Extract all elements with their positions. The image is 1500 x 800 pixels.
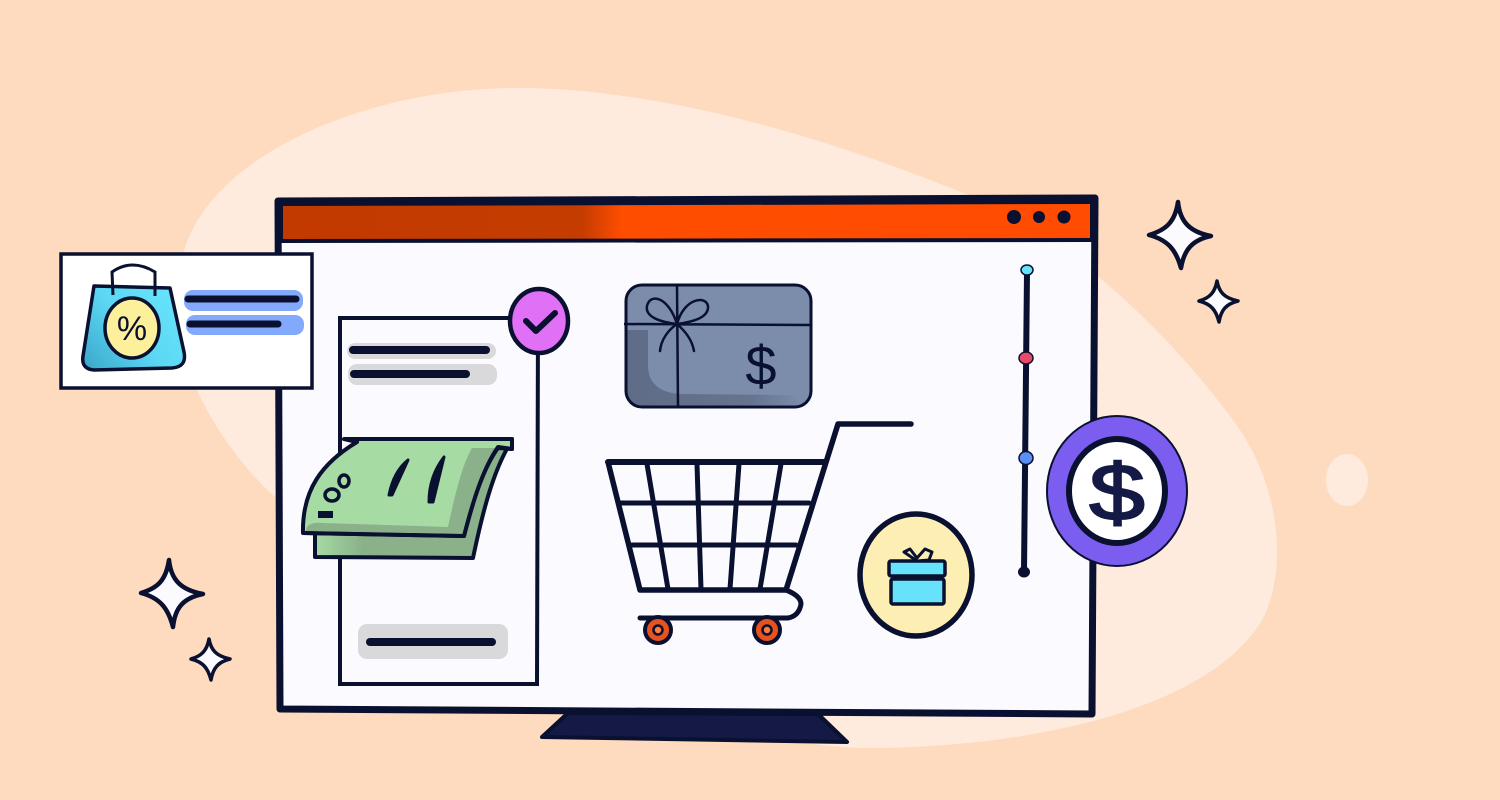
- icon: shopping bag with percent: [83, 265, 184, 370]
- sparkle: bottom left large: [141, 560, 203, 627]
- wheel right: [754, 617, 780, 643]
- icon: banknotes: [303, 439, 512, 558]
- browser title bar: [281, 201, 1092, 243]
- icon: gift card: [624, 285, 812, 407]
- promo tag panel: [61, 254, 312, 388]
- badge: dollar coin: $: [1089, 448, 1145, 538]
- receipt panel: [340, 318, 538, 684]
- icon: shopping bag with percent: %: [117, 310, 147, 348]
- badge: check mark: [510, 289, 568, 353]
- monitor screen: [278, 198, 1095, 714]
- wheel left: [645, 617, 671, 643]
- badge: gift: [860, 514, 972, 636]
- background oval: [1326, 454, 1368, 506]
- progress slider: [1018, 265, 1033, 578]
- sparkle: top right large: [1149, 202, 1211, 268]
- badge: dollar coin: [1047, 416, 1187, 566]
- icon: shopping cart: [608, 424, 911, 643]
- sparkle: bottom left small: [191, 639, 230, 680]
- icon: gift card: $: [745, 334, 777, 397]
- sparkle: top right small: [1199, 281, 1238, 322]
- background blob: [180, 88, 1277, 748]
- monitor stand: [542, 713, 847, 742]
